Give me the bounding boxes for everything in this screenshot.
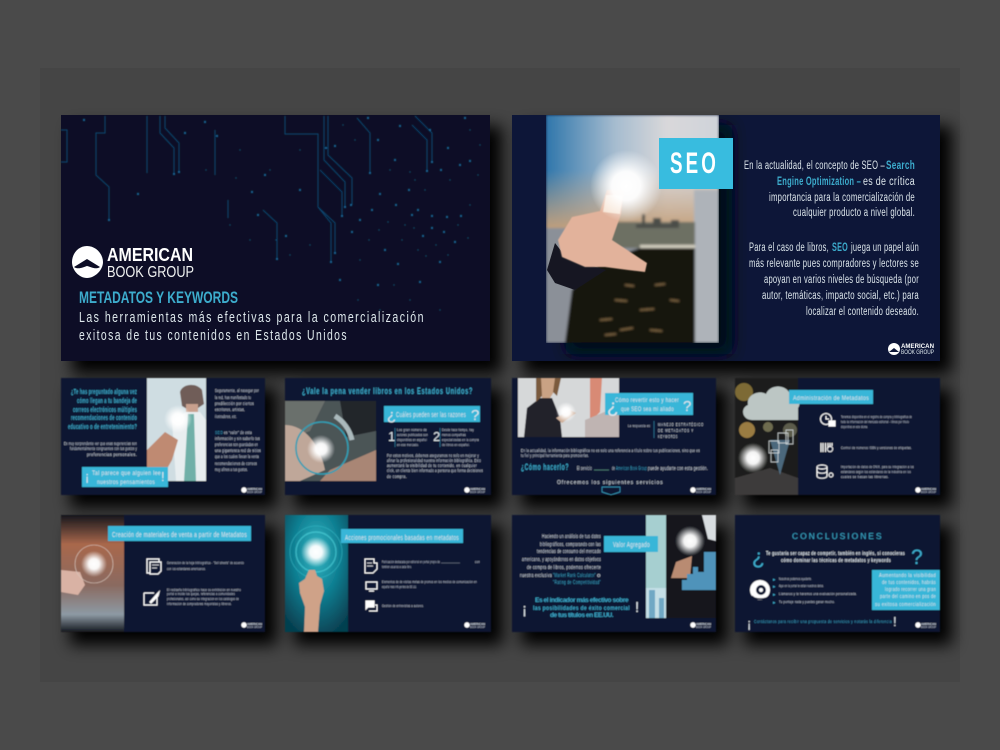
side text: ilustradores, etc. [215,414,237,419]
logo [464,622,485,629]
callout: ! [161,469,165,484]
text: service 2: Control de números ISBN y versiones de etiquetas. [841,446,912,450]
side text: es “valor” de esta [224,430,252,435]
paragraph: aumentará la visibilidad de tu contenido, en cualquier [387,463,477,468]
text block: bibliográficos, comparando con las [540,542,601,548]
text block: nuestra exclusiva [520,573,552,579]
photo: finger and tech [61,515,124,632]
bullet list: Tu puntaje nada y puedes ganar mucho. [779,599,835,604]
text: materials 1 [167,560,244,571]
footer call to action: ¡ [747,616,752,631]
bullet list: ▸ [773,592,776,598]
panel: title slide [61,115,490,361]
heading: ¿Vale la pena vender libros en los Estados Unidos? [302,386,473,396]
reason 1: disponibles en español [397,438,427,442]
reason 1: autores publicados son [397,433,428,437]
text block: de compra de libros, podemos ofrecerte [527,565,601,571]
question: ? [911,546,923,569]
logo: AMERICAN [696,487,711,491]
sleeve [547,243,606,290]
callout box: de tus contenidos, habrás [882,580,936,586]
logo [464,487,485,494]
text: action 1: Publicación destacada por editorial en portal propio de [382,560,440,564]
photo: teal hand touching light [285,515,348,632]
side text: muy afines a tus gustos. [215,467,248,472]
strategy label: La respuesta es: [628,423,651,428]
strategy label: MANEJO ESTRATÉGICO [658,421,704,427]
reason 1: Los gran número de [397,428,427,432]
text: action 2 [382,580,477,589]
label [789,390,873,404]
reason 1: en ese mercado. [397,443,419,447]
supporting text [64,441,137,457]
logo: BOOK GROUP [696,491,711,494]
glow [592,152,659,220]
question text [68,389,137,431]
body text [521,448,700,458]
text: materials 2: portal e incide los quejas, referencias a comunidades [167,591,235,596]
logo [241,622,262,629]
text: action 2: Elementos de de visitas metas de promos en los medios de comunicación en [382,580,477,584]
icon: pen [144,592,159,605]
supporting text: Es muy sorprendente ver que esas sugerencias son [64,441,137,446]
services line: Ofrecemos los siguientes servicios [557,480,663,486]
slide shadows [70,126,952,645]
callout: nuestros pensamientos [97,479,155,486]
icon: database [817,465,833,478]
subtitle [79,310,425,344]
panel: small slide 5 [61,515,265,632]
text: action 1: también usuarios a cada libro. [382,565,412,569]
side text [215,388,261,472]
text block: SEO for books: Para el caso de libros, [749,242,829,254]
panel: SEO slide [512,115,940,361]
arrow [602,487,620,495]
label: Administración de Metadatos [793,395,869,402]
text: service 3: cuales se basan las librerías. [841,475,889,479]
logo [915,487,936,494]
reason 2: menos compañías [442,433,466,437]
bullet list: Llámanos y te haremos una evaluación personalizada. [779,591,857,596]
logo wordmark [107,245,194,281]
bullet list: ▸ [773,600,776,606]
photo: hand pointing over city [546,115,719,343]
text block: SEO definition [744,160,915,219]
photo: scientist touching screen [147,378,206,481]
question text: educativo o de entretenimiento? [68,424,137,431]
bullet list [773,576,857,606]
text: service 1: disponibles en este idioma. [841,425,868,429]
icon: speech bubbles [366,601,377,611]
subtitle: Las herramientas más efectivas para la comercialización [79,310,425,326]
supporting text: fundamentalmente congruentes con tus gustos y [70,446,137,451]
heading: METADATOS Y KEYWORDS [79,288,238,307]
logo: BOOK GROUP [921,626,936,629]
label: Acciones promocionales basadas en metadatos [345,535,459,542]
logo [690,622,711,629]
side text: predilección por ciertos [215,401,254,406]
footer call to action: ! [893,614,897,629]
reason 2 [433,428,479,447]
reason 1: 1 [388,429,396,444]
callout: reasons [384,406,480,424]
paragraph: afinar la profesionalidad nuestra información bibliográfica. Esto [387,458,481,463]
callout box: logrado recorrer una gran [885,587,936,593]
callout [82,467,168,487]
subtitle: exitosa de tus contenidos en Estados Unidos [79,328,348,344]
icon: clock user [820,414,835,426]
logo [241,487,262,494]
text block: americano, y apoyándonos en datos objetivos [522,557,601,563]
heading: CONCLUSIONES [792,531,882,541]
callout: ¡ [85,469,90,484]
question text: ¿Te has preguntado alguna vez [71,389,137,396]
text block: SEO for books: juega un papel aún [850,242,919,254]
side text: que a los cuales llevan la venta [215,454,259,459]
SEO badge: SEO [670,147,719,180]
logo [690,487,711,494]
panel: small slide 1 [61,378,265,495]
callout question: que SEO sea mi aliado [621,406,674,413]
side text: la red, has manifestado tu [215,395,251,400]
logo: AMERICAN [901,344,934,350]
logo: BOOK GROUP [247,626,262,629]
text: action 3: Gestión de entrevistas a autores. [382,604,424,608]
logo: BOOK GROUP [247,491,262,494]
supporting text: preferencias personales. [87,452,137,457]
paragraph: click, un cliente bien informado a persona que forma decisiones [387,468,483,473]
side text: información y sin saberlo tus [215,436,260,441]
logo: AMERICAN [921,487,936,491]
text: materials 1: Generación de la hoja bibliográfica - "Sell sheets" de acuerdo [167,560,244,565]
bullet list: ▸ [773,577,776,583]
callout: Tal parece que alguien lee [92,470,161,477]
highlighted statement [522,597,640,619]
callout box [872,570,940,610]
text: service 3 [841,465,914,479]
photo shadow [566,125,732,354]
how-to line: ¿Cómo hacerlo? [521,462,569,472]
text block: SEO for books: localizar el contenido deseado. [806,306,919,318]
callout: reasons: ¿ [387,407,397,424]
question text: recomendaciones de contenido [71,415,137,422]
SEO badge [659,138,733,189]
text: service 1 [841,415,912,429]
how-to line: American Book Group [616,466,647,472]
how-to line: El servicio [577,466,592,472]
hand [558,190,647,272]
icon: screen [366,582,377,591]
callout question: ? [683,398,692,415]
text block: SEO definition: cualquier producto a nivel global. [793,207,915,219]
side text: SEO [215,430,223,435]
label [604,536,658,552]
text: materials 2: profesionales, así como su integración en los catálogos de [167,596,239,601]
logo: AMERICAN [696,622,711,626]
question text: correos electrónicos múltiples [73,407,137,414]
callout: reasons: Cuáles pueden ser las razones [396,412,466,419]
text: materials 2: información de compradores mayoristas y libreros. [167,601,232,606]
text block: "Rating de Competitividad" [553,580,601,586]
logo: AMERICAN [470,622,485,626]
text block: SEO for books: apoyan en varios niveles de búsqueda (por [764,274,919,286]
question: Te gustaría ser capaz de competir, también en inglés, si conocieras [766,551,905,557]
logo: AMERICAN [470,487,485,491]
highlighted statement: de tus títulos en EE.UU. [550,612,614,619]
question text: cómo llegan a tu bandeja de [77,398,137,405]
label: Creación de materiales de venta a partir de Metadatos [112,530,247,539]
side text: una gigantesca red de sitios [215,448,261,453]
how-to line: puede ayudarte con esta gestión. [648,466,708,472]
logo wordmark: BOOK GROUP [107,264,194,281]
text block: SEO definition: importancia para la comercialización de [769,192,915,204]
callout box: parte del camino en pos de [880,594,936,600]
highlighted statement: ! [635,599,640,616]
logo: AMERICAN [247,487,262,491]
strategy label: KEYWORDS [658,434,678,439]
body text: tu fiel y principal herramienta para promoverlas. [521,453,589,458]
logo [888,343,934,356]
circuit traces and lights [61,116,480,310]
footer call to action [747,614,897,631]
label [341,529,463,543]
text block: SEO for books [749,242,919,318]
logo: AMERICAN [921,622,936,626]
question: cómo dominar las técnicas de metadatos y keywords [781,558,891,564]
strategy label [628,421,704,439]
logo: BOOK GROUP [696,626,711,629]
label: Valor Agregado [613,542,650,549]
side text: Seguramente, al navegar por [215,388,259,393]
strategy label: DE METADATOS Y [658,428,694,433]
icon: barcode search [821,443,833,452]
icon: logo mark [72,246,103,278]
bullet list: ▸ [773,584,776,590]
panel: small slide 3 [512,378,716,495]
highlighted statement: ¡ [522,601,527,618]
footer call to action: Contáctanos para recibir una propuesta de servicios y notarás la diferencia [754,619,892,624]
highlighted statement: Es el indicador más efectivo sobre [535,597,629,604]
callout question [605,393,693,418]
logo: BOOK GROUP [921,491,936,494]
text block: SEO definition: Search [886,160,915,172]
text: materials 1: con los estándares americanos. [167,566,206,571]
text block: SEO definition: En la actualidad, el concepto de SEO – [744,160,885,172]
panel: small slide 7 [512,515,716,632]
photo: cloud over tablet [735,378,800,495]
text: service 3: Importación de datos de ONIX, para su integración a los [841,465,914,469]
text block: SEO definition: es de crítica [863,176,915,188]
logo: BOOK GROUP [901,350,934,356]
text: action 1: con [475,560,480,564]
callout question: Cómo revertir esto y hacer [615,397,679,404]
icon: document [365,559,377,573]
logo: BOOK GROUP [470,626,485,629]
text: service 3: estándares según los estándares de la industria en los [841,470,911,474]
text block: SEO for books: SEO [832,242,848,254]
side text: preferencias son guardadas en [215,442,258,447]
how-to line: de [612,466,615,472]
text block: SEO for books: autor, temáticas, impacto social, etc.) para [762,290,919,302]
panel: small slide 2 [285,378,491,495]
question: ¿ [752,546,765,569]
label [108,526,251,541]
highlighted statement: las posibilidades de éxito comercial [533,605,630,612]
text block: tendencias de consumo del mercado [537,549,601,555]
reason 2: 2 [433,429,441,444]
logo: BOOK GROUP [470,491,485,494]
logo [72,245,194,281]
body text: En la actualidad, la información bibliográfica no es solo una referencia a título sobre tus publicaciones, sino que es [521,448,700,453]
question [752,546,923,569]
text: action 2: español más influyentes de EE.UU. [382,585,417,589]
reason 1 [388,428,428,447]
panel: small slide 6 [285,515,491,632]
text block: SEO for books: más relevante pues compradores y lectores se [749,258,919,270]
text: service 1: todo la información del mercado editorial - libros por título [841,420,909,424]
text block: Haciendo un análisis de tus datos [542,534,601,540]
callout: reasons: ? [471,407,480,424]
callout box: su exitosa comercialización [875,602,936,608]
side text: recomendaciones de correos [215,461,257,466]
icon: document [147,559,161,574]
reason 2: de libros en español. [442,443,470,447]
icon: support agent [750,580,770,600]
photo: hands and interface [285,401,376,481]
panel: conclusions slide [735,515,940,632]
backdrop panel [40,68,960,682]
photo: businessman with chart [646,515,716,618]
photo: woman with tablet [518,378,619,437]
reason 2: especializadas en la compra [442,438,479,442]
side text: escritores, artistas, [215,407,245,412]
reason 2: Desde hace tiempo, hay [442,428,474,432]
text: service 1: Tenemos disponible en el registro de compra y bibliográfica de [841,415,912,419]
callout question: ¿ [607,397,619,418]
logo: AMERICAN [247,622,262,626]
paragraph [387,453,483,479]
logo [915,622,936,629]
logo wordmark: AMERICAN [107,245,193,265]
text: materials 2 [167,587,241,606]
text block [520,534,601,586]
bullet list: Aquí en la portal te están nuestros datos. [779,583,824,588]
text block: "Market Rank Calculator" [553,573,596,579]
bullet list: Nosotros podemos ayudarte. [779,576,812,581]
paragraph: de compra. [387,474,407,479]
text block: o [597,573,601,579]
how-to line [521,462,708,472]
callout box: Aumentando la visibilidad [879,573,936,579]
text: materials 2: El rediseño bibliográfico hace su exhibición en nuestro [167,587,241,592]
panel: small slide 4 [735,378,940,495]
paragraph: Por estos motivos, debemos asegurarnos no solo en mejorar y [387,453,479,458]
text block: SEO definition: Engine Optimization – [777,176,861,188]
text: action 1 [382,560,480,569]
